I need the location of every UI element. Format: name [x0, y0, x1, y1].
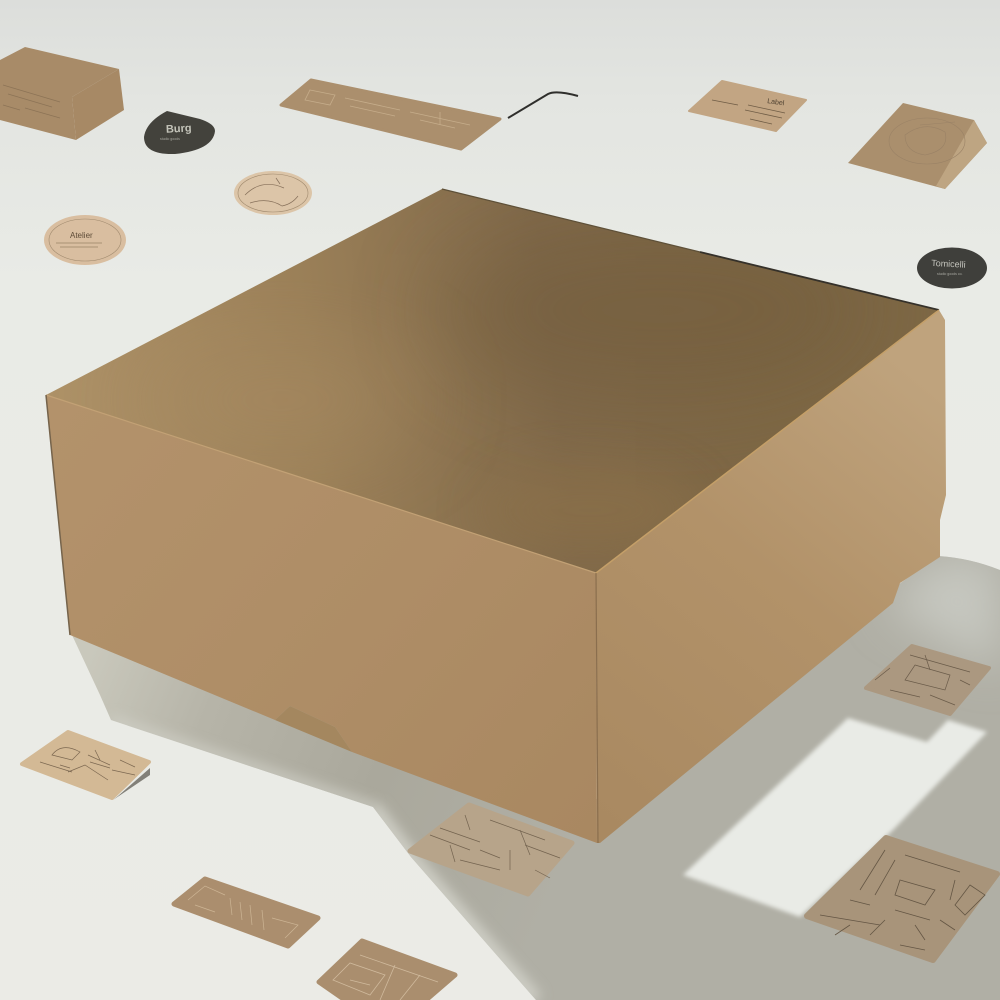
light patch in the shadow — [683, 718, 987, 917]
doodle card, bottom — [319, 941, 455, 1000]
thin black hook line — [508, 92, 578, 118]
doodle card, left — [22, 732, 150, 800]
black teardrop sticker: Burg — [166, 122, 192, 136]
doodle card in shadow, lower right — [807, 838, 997, 960]
black oval sticker: Tomicelli — [931, 258, 966, 270]
black teardrop sticker: studio goods — [160, 137, 180, 141]
doodle card in shadow, right — [866, 646, 989, 714]
main kraft box — [46, 189, 946, 843]
box: open top panel — [46, 189, 939, 573]
business card, top right: Label — [767, 98, 785, 107]
business card, top right — [689, 81, 806, 131]
box: right front panel — [596, 310, 946, 843]
black oval sticker — [917, 248, 987, 288]
doodle card, bottom centre — [174, 879, 318, 946]
kraft sticker circle, lower: Atelier — [70, 231, 93, 240]
kraft sticker circle, lower — [44, 215, 126, 265]
long card, top centre — [281, 80, 500, 149]
black teardrop sticker — [144, 111, 215, 154]
box: left front panel — [46, 395, 597, 843]
black oval sticker: studio goods co. — [937, 272, 963, 276]
box: notch flap — [275, 706, 352, 752]
kraft sticker circle, upper — [234, 171, 312, 215]
small box, top left — [0, 47, 124, 140]
card in shadow, below box — [410, 805, 572, 894]
kraft slab, top right — [848, 103, 987, 189]
cast shadow on the floor — [60, 540, 1000, 1000]
